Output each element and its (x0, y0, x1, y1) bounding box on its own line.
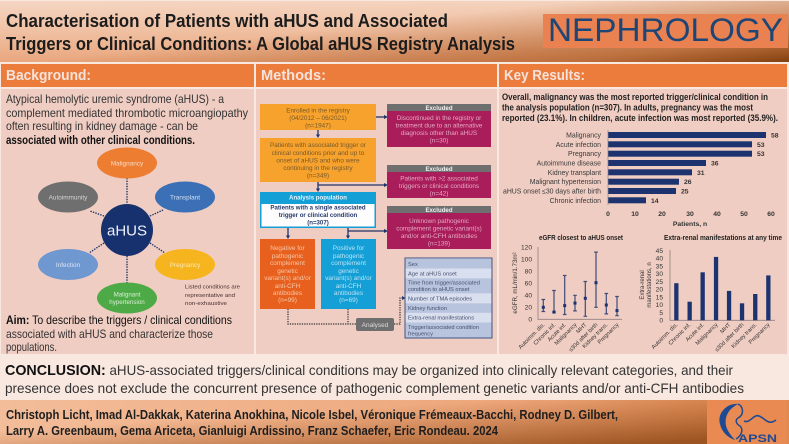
bar chart: triggers by patients: 30 (686, 211, 694, 218)
bar chart: extra-renal manifestations (640, 235, 782, 353)
list: analysed variables: Trigger/associated condition (408, 325, 479, 331)
list: analysed variables: Time from trigger/associated (408, 280, 480, 286)
list: analysed variables: Extra-renal manifestations (408, 316, 474, 322)
line chart: eGFR closest to aHUS onset: 40 (525, 292, 532, 300)
condition: malignancy (97, 148, 157, 178)
panel: methods (256, 89, 497, 354)
box: analysis population: Analysis population (289, 194, 347, 202)
dotted connectors to analysed (288, 298, 403, 324)
condition: infection: Infection (56, 262, 81, 269)
bar chart: extra-renal manifestations: Pregnancy (748, 322, 772, 346)
list: analysed variables: frequency (408, 332, 433, 338)
bar chart: triggers by patients: 10 (631, 211, 639, 218)
condition: infection (38, 249, 98, 280)
box: excluded unknown variants (387, 206, 491, 249)
bar chart: extra-renal manifestations: 20 (656, 287, 663, 294)
line chart: eGFR closest to aHUS onset: Kidney trans. (582, 322, 610, 350)
bar chart: triggers by patients: Kidney transplant (548, 170, 601, 177)
box: positive for variants: complement (331, 260, 366, 267)
condition: pregnancy (155, 249, 215, 280)
condition: malignant hypertension: hypertension (109, 299, 145, 306)
flow connectors (286, 115, 388, 239)
box: excluded unknown variants: and/or anti-CFH antibodies (401, 233, 477, 240)
section heading bars: Methods: (261, 67, 326, 84)
bar chart: extra-renal manifestations: ≤30d after birth (714, 322, 745, 353)
box: excluded discontinued: Discontinued in the registry or (397, 115, 482, 122)
box: patients with associated trigger: onset of aHUS and who were (276, 158, 360, 164)
box: negative for variants: genetic (277, 268, 299, 275)
bar chart: triggers by patients: aHUS onset ≤30 days after birth (503, 188, 601, 196)
line chart: eGFR closest to aHUS onset: 60 (525, 280, 532, 288)
background intro text (6, 92, 248, 147)
line chart: eGFR closest to aHUS onset: Pregnancy (597, 322, 621, 346)
box: negative for variants: variant(s) and/or (264, 275, 312, 282)
bar chart: triggers by patients: 53 (757, 142, 765, 149)
bar chart: triggers by patients: Autoimmune disease (537, 160, 601, 168)
aim text: associated with aHUS and characterize those (6, 327, 213, 341)
bar chart: triggers by patients: Patients, n (673, 221, 707, 228)
authors: Larry A. Greenbaum, Gema Ariceta, Gianluigi Ardissino, Franz Schaefer, Eric Rondeau. 2024 (6, 424, 498, 438)
authors: Christoph Licht, Imad Al-Dakkak, Katerina Anokhina, Nicole Isbel, Véronique Frémeaux-Bacchi, Rodney D. Gilbert, (6, 408, 618, 422)
section heading bars: Background: (6, 67, 91, 84)
line chart: eGFR closest to aHUS onset: 0 (528, 316, 532, 324)
line chart: eGFR closest to aHUS onset: ≤30d after birth (568, 322, 599, 353)
aim text (6, 313, 232, 354)
line chart: eGFR closest to aHUS onset: Chronic inf. (533, 322, 558, 347)
box: enrolled: (n=1947) (305, 122, 331, 130)
bar chart: triggers by patients (503, 130, 779, 228)
line chart: eGFR closest to aHUS onset (512, 235, 624, 353)
line chart: eGFR closest to aHUS onset: Acute inf. (547, 322, 568, 343)
background intro text: complement mediated thrombotic microangiopathy (6, 106, 248, 120)
box: enrolled (260, 104, 376, 130)
box: analysed (356, 318, 394, 331)
bar chart: extra-renal manifestations: Autoimm. dis. (651, 322, 680, 351)
list: analysed variables (405, 258, 492, 338)
bar chart: extra-renal manifestations: Extra-renal manifestations at any time (664, 235, 782, 242)
line chart: eGFR closest to aHUS onset: eGFR, mL/min/1.73m² (512, 252, 519, 314)
box: excluded multiple triggers (387, 165, 491, 198)
logo: APSN (707, 400, 787, 444)
box: positive for variants: (n=69) (339, 297, 358, 304)
box: excluded unknown variants: Excluded (425, 207, 453, 214)
box: negative for variants (260, 239, 315, 309)
footer band (0, 400, 789, 444)
list: analysed variables: Kidney function (408, 306, 447, 312)
bar chart: triggers by patients: 36 (711, 160, 719, 168)
box: negative for variants: Negative for (270, 245, 306, 252)
list: analysed variables: Number of TMA episodes (408, 296, 472, 302)
conclusion: presence does not exclude the concurrent presence of pathogenic complement genetic variants and/or anti-CFH antibodies (5, 380, 744, 396)
panel: key results (499, 89, 787, 354)
bar chart: extra-renal manifestations: Chronic inf. (668, 322, 693, 347)
box: analysis population (260, 192, 376, 228)
journal logo: Nephrology: NEPHROLOGY (548, 12, 783, 48)
bar chart: triggers by patients: 31 (697, 170, 705, 177)
list: analysed variables: Sex (408, 262, 418, 268)
bar chart: triggers by patients: 50 (740, 211, 748, 218)
box: excluded discontinued: treatment due to an alternative (396, 122, 483, 130)
box: positive for variants: antibodies (334, 290, 363, 297)
arrow: to outcome list (402, 296, 406, 300)
box: patients with associated trigger: continuing in the registry (283, 165, 353, 172)
line chart: eGFR closest to aHUS onset: 80 (525, 268, 532, 276)
key results summary text: the analysis population (n=307). In adults, pregnancy was the most (502, 102, 753, 112)
box: analysed: Analysed (362, 322, 389, 329)
bar chart: triggers by patients: Pregnancy (568, 151, 602, 158)
box: patients with associated trigger (260, 138, 376, 182)
bar chart: extra-renal manifestations: manifestations, n (647, 262, 653, 308)
bar chart: extra-renal manifestations: 15 (656, 294, 663, 301)
box: negative for variants: antibodies (273, 290, 302, 297)
box: excluded discontinued (387, 104, 491, 147)
bar chart: extra-renal manifestations: 0 (659, 318, 663, 325)
aim text: populations. (6, 340, 57, 354)
list: analysed variables: Age at aHUS onset (408, 272, 457, 278)
condition: autoimmunity (38, 182, 98, 212)
condition: malignancy: Malignancy (111, 160, 144, 168)
box: excluded discontinued: Excluded (425, 105, 453, 112)
centre node: aHUS (101, 204, 153, 256)
box: excluded multiple triggers: Patients with >2 associated (400, 176, 478, 182)
aim text: Aim: To describe the triggers / clinical conditions (6, 313, 232, 327)
box: excluded unknown variants: Unknown pathogenic (409, 218, 470, 225)
section heading bars (1, 64, 787, 87)
authors (6, 408, 618, 438)
box: negative for variants: pathogenic (272, 253, 304, 260)
title: Characterisation of Patients with aHUS and Associated (6, 11, 448, 31)
condition: transplant: Transplant (170, 194, 200, 202)
box: positive for variants (321, 239, 376, 309)
title (6, 11, 515, 54)
condition: pregnancy: Pregnancy (170, 262, 201, 269)
bar chart: triggers by patients: Acute infection (556, 142, 601, 149)
bar chart: extra-renal manifestations: Kidney trans. (731, 322, 759, 350)
bar chart: triggers by patients: 25 (681, 188, 689, 196)
bar chart: triggers by patients: 58 (771, 132, 779, 140)
bar chart: extra-renal manifestations: 35 (656, 263, 663, 270)
bar chart: triggers by patients: 53 (757, 151, 765, 158)
condition: malignant hypertension (97, 282, 157, 314)
header band (0, 1, 789, 62)
line chart: eGFR closest to aHUS onset: MHT (575, 322, 589, 335)
box: excluded multiple triggers: Excluded (425, 166, 453, 173)
box: negative for variants: anti-CFH (275, 283, 301, 290)
centre node: aHUS: aHUS (107, 222, 147, 240)
bar chart: extra-renal manifestations: 25 (656, 279, 663, 286)
box: positive for variants: pathogenic (333, 253, 365, 260)
box: patients with associated trigger: clinical conditions prior and up to (272, 150, 365, 157)
bar chart: extra-renal manifestations: Extra-renal (640, 270, 646, 300)
bar chart: extra-renal manifestations: 10 (656, 302, 663, 309)
box: patients with associated trigger: (n=349) (307, 172, 329, 180)
line chart: eGFR closest to aHUS onset: eGFR closest to aHUS onset (539, 235, 624, 242)
box: patients with associated trigger: Patients with associated trigger or (270, 142, 367, 149)
panel: background (1, 89, 254, 354)
bar chart: triggers by patients: 14 (651, 198, 659, 205)
note: listed conditions: non-exhaustive (185, 301, 227, 307)
bar chart: extra-renal manifestations: Acute inf. (685, 322, 706, 343)
bar chart: triggers by patients: 40 (713, 211, 721, 218)
list: analysed variables: condition to aHUS onset (408, 287, 470, 293)
box: positive for variants: genetic (338, 268, 360, 275)
box: negative for variants: complement (270, 260, 305, 267)
background intro text: associated with other clinical conditions. (6, 133, 195, 147)
condition: autoimmunity: Autoimmunity (49, 194, 88, 202)
box: excluded multiple triggers: triggers or clinical conditions (399, 183, 479, 190)
bar chart: triggers by patients: Malignancy (566, 132, 602, 140)
background intro text: often resulting in kidney damage - can be (6, 119, 198, 133)
conclusion (5, 362, 744, 396)
box: enrolled: (04/2012 – 06/2021) (289, 115, 347, 122)
conclusion: CONCLUSION: aHUS-associated triggers/clinical conditions may be organized into clinically relevant categories, and their (5, 362, 733, 379)
bar chart: extra-renal manifestations: 30 (656, 271, 663, 278)
box: analysis population: (n=307) (307, 220, 329, 226)
note: listed conditions: Listed conditions are (185, 284, 240, 290)
bar chart: extra-renal manifestations: MHT (719, 322, 733, 335)
box: excluded unknown variants: complement genetic variant(s) (396, 226, 482, 232)
section heading bars: Key Results: (504, 67, 585, 84)
background intro text: Atypical hemolytic uremic syndrome (aHUS) - a (6, 92, 224, 106)
bar chart: extra-renal manifestations: 45 (656, 248, 663, 255)
bar chart: triggers by patients: 0 (606, 211, 610, 218)
box: positive for variants: anti-CFH (336, 283, 362, 290)
bar chart: triggers by patients: 60 (767, 211, 775, 218)
box: excluded multiple triggers: (n=42) (430, 190, 448, 198)
box: positive for variants: Positive for (333, 245, 365, 252)
box: enrolled: Enrolled in the registry (286, 108, 351, 114)
bar chart: extra-renal manifestations: 40 (656, 256, 663, 263)
bar chart: extra-renal manifestations: Malignancy (695, 322, 720, 347)
bar chart: triggers by patients: 26 (684, 179, 692, 186)
condition: malignant hypertension: Malignant (114, 292, 141, 298)
diagram: aHUS associated conditions (38, 148, 215, 314)
note: listed conditions: representative and (185, 293, 235, 299)
box: negative for variants: (n=99) (278, 297, 297, 304)
bar chart: triggers by patients: Malignant hypertension (530, 179, 601, 186)
box: positive for variants: variant(s) and/or (325, 275, 373, 282)
line chart: eGFR closest to aHUS onset: 120 (521, 244, 532, 252)
box: analysis population: Patients with a single associated (270, 204, 366, 212)
key results summary text (502, 92, 778, 123)
bar chart: triggers by patients: Chronic infection (550, 198, 601, 205)
bar chart: extra-renal manifestations: 5 (659, 310, 663, 317)
box: excluded discontinued: diagnosis other than aHUS (401, 130, 477, 137)
box: excluded discontinued: (n=30) (430, 138, 448, 144)
bar chart: triggers by patients: 20 (658, 211, 666, 218)
box: analysis population: trigger or clinical condition (279, 212, 358, 219)
line chart: eGFR closest to aHUS onset: 20 (525, 304, 532, 312)
line chart: eGFR closest to aHUS onset: Autoimm. dis. (518, 322, 547, 351)
note: listed conditions (185, 284, 240, 307)
condition: transplant (155, 182, 215, 212)
box: excluded unknown variants: (n=139) (428, 240, 450, 248)
title: Triggers or Clinical Conditions: A Global aHUS Registry Analysis (6, 34, 515, 54)
line chart: eGFR closest to aHUS onset: Malignancy (554, 322, 579, 347)
line chart: eGFR closest to aHUS onset: 100 (521, 256, 532, 264)
